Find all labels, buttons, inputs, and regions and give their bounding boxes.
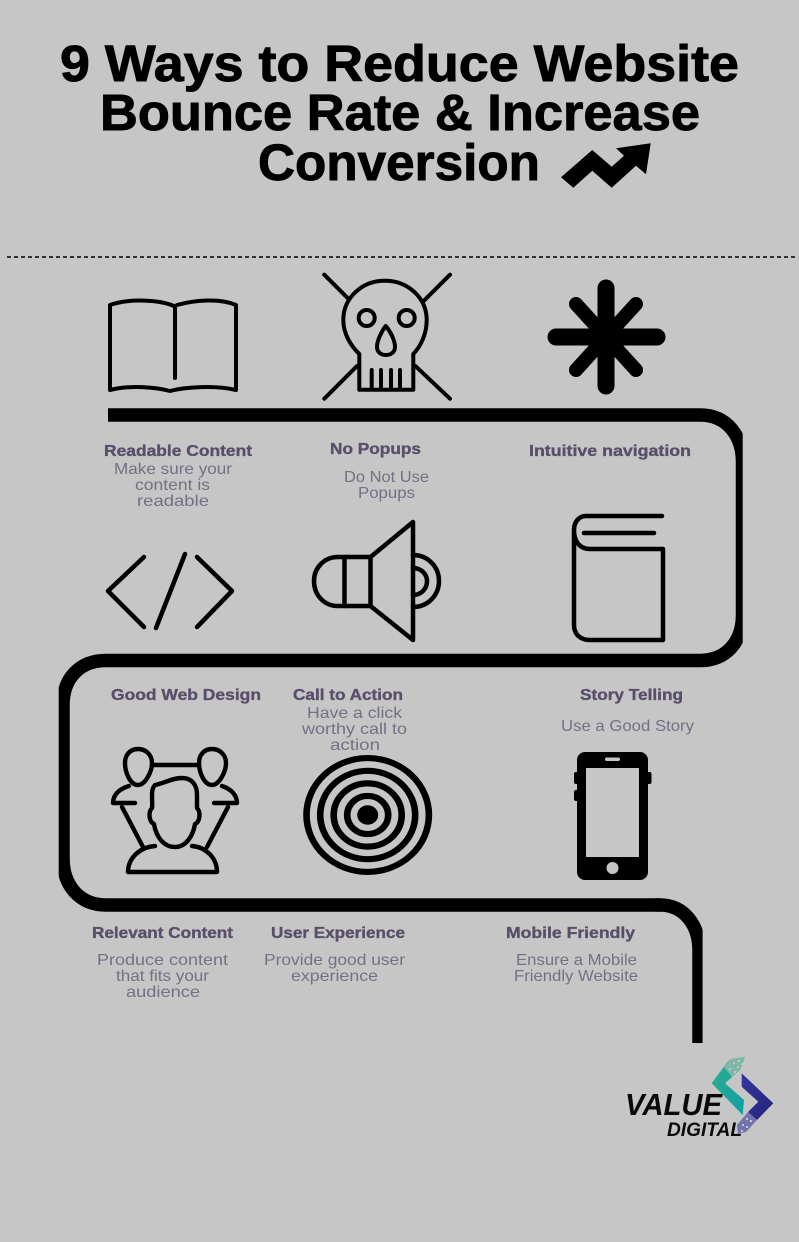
description: story telling: Use a Good Story <box>561 718 694 735</box>
title: Conversion <box>258 134 540 191</box>
description: readable content: Make sure your <box>114 461 233 478</box>
description: readable content: content is <box>135 477 210 494</box>
heading: story telling: Story Telling <box>580 687 683 704</box>
description: user experience: Provide good user <box>264 952 406 969</box>
icon: smartphone <box>574 752 652 880</box>
description: relevant content <box>97 952 229 1001</box>
description: no popups: Popups <box>358 485 415 502</box>
description: call to action: Have a click <box>307 705 403 722</box>
panel: readable content <box>104 300 253 510</box>
panel: mobile friendly <box>506 752 652 985</box>
heading: good web design: Good Web Design <box>111 687 261 704</box>
heading: intuitive navigation: Intuitive navigation <box>529 443 691 460</box>
icon: asterisk <box>556 288 657 386</box>
description: no popups <box>344 469 429 502</box>
description: readable content: readable <box>137 493 209 510</box>
icon: skull and crossbones <box>324 275 450 399</box>
description: relevant content: audience <box>126 984 200 1001</box>
winding path line <box>63 415 742 1043</box>
logo text: DIGITAL <box>667 1120 742 1141</box>
logo: Value Digital <box>625 1057 773 1141</box>
panel: relevant content <box>92 749 237 1001</box>
title: 9 Ways to Reduce Website <box>60 35 739 92</box>
heading: call to action: Call to Action <box>293 687 403 704</box>
description: mobile friendly: Ensure a Mobile <box>516 952 637 969</box>
description: call to action: action <box>330 737 380 754</box>
icon: closed book <box>574 516 663 640</box>
panel: intuitive navigation <box>529 288 691 460</box>
icon: target <box>306 758 429 872</box>
panel: good web design <box>108 554 261 704</box>
description: readable content <box>114 461 233 510</box>
title <box>60 35 739 191</box>
icon: megaphone speaker <box>314 522 439 640</box>
panel: call to action <box>293 522 439 754</box>
description: relevant content: Produce content <box>97 952 229 969</box>
heading: user experience: User Experience <box>271 925 405 942</box>
description: relevant content: that fits your <box>116 968 210 985</box>
heading: mobile friendly: Mobile Friendly <box>506 925 635 942</box>
description: call to action: worthy call to <box>301 721 407 738</box>
description: user experience <box>264 952 406 985</box>
description: mobile friendly: Friendly Website <box>514 968 638 985</box>
icon: code brackets <box>108 554 232 628</box>
panel: story telling <box>561 516 694 735</box>
description: user experience: experience <box>291 968 378 985</box>
logo mark <box>712 1057 773 1134</box>
description: mobile friendly <box>514 952 638 985</box>
logo text <box>625 1087 742 1141</box>
heading: no popups: No Popups <box>330 441 421 458</box>
heading: relevant content: Relevant Content <box>92 925 234 942</box>
icon: people group <box>113 749 237 872</box>
description: call to action <box>301 705 407 754</box>
title: Bounce Rate & Increase <box>100 84 700 141</box>
icon: open book <box>110 300 236 391</box>
panel: user experience <box>264 758 429 985</box>
description: no popups: Do Not Use <box>344 469 429 486</box>
heading: readable content: Readable Content <box>104 443 253 460</box>
logo text: VALUE <box>625 1087 723 1122</box>
icon: rising arrow <box>561 143 651 188</box>
panel: no popups <box>324 275 450 502</box>
